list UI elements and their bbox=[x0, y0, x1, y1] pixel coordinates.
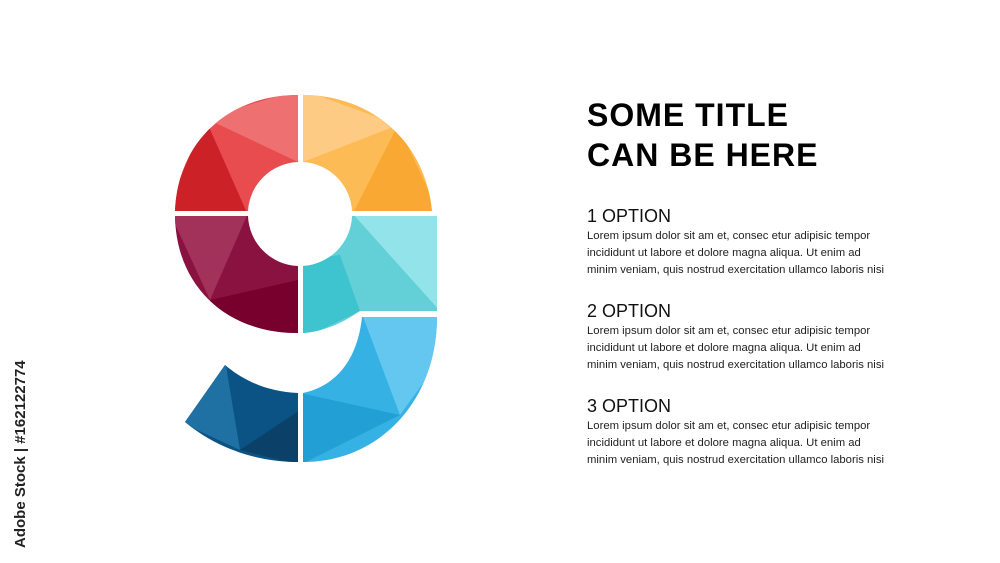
segment: maroon middle-left bbox=[175, 216, 298, 333]
option 1: Lorem ipsum dolor sit am et, consec etur adipisic tempor bbox=[587, 230, 870, 242]
option 2 bbox=[587, 301, 884, 371]
option 3: Lorem ipsum dolor sit am et, consec etur adipisic tempor bbox=[587, 420, 870, 432]
option 1: incididunt ut labore et dolore magna aliqua. Ut enim ad bbox=[587, 247, 861, 259]
segment: teal middle-right bbox=[303, 216, 437, 333]
option 1 bbox=[587, 206, 884, 276]
option 2: 2 OPTION bbox=[587, 301, 671, 321]
figure nine chart bbox=[175, 95, 437, 462]
option 3: incididunt ut labore et dolore magna aliqua. Ut enim ad bbox=[587, 437, 861, 449]
title: CAN BE HERE bbox=[587, 137, 818, 173]
segment: light blue bottom-right bbox=[300, 314, 440, 465]
option 3: 3 OPTION bbox=[587, 396, 671, 416]
option 3 bbox=[587, 396, 884, 466]
option 3: minim veniam, quis nostrud exercitation ullamco laboris nisi bbox=[587, 454, 884, 466]
segment: dark blue bottom-left bbox=[185, 365, 298, 462]
option 2: minim veniam, quis nostrud exercitation ullamco laboris nisi bbox=[587, 359, 884, 371]
option 1: minim veniam, quis nostrud exercitation ullamco laboris nisi bbox=[587, 264, 884, 276]
option 1: 1 OPTION bbox=[587, 206, 671, 226]
title bbox=[587, 97, 818, 173]
segment: red top-left bbox=[175, 95, 298, 211]
option 2: incididunt ut labore et dolore magna aliqua. Ut enim ad bbox=[587, 342, 861, 354]
watermark text: Adobe Stock | #162122774 bbox=[12, 360, 29, 548]
title: SOME TITLE bbox=[587, 97, 789, 133]
segment: orange top-right bbox=[303, 95, 432, 211]
option 2: Lorem ipsum dolor sit am et, consec etur adipisic tempor bbox=[587, 325, 870, 337]
